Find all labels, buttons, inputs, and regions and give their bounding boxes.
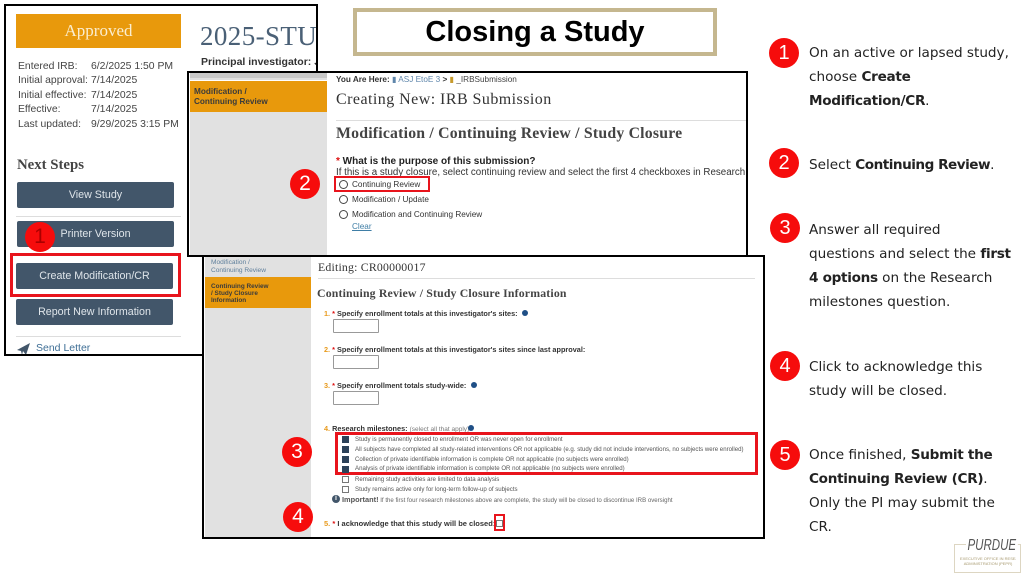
question 1: 1. * Specify enrollment totals at this investigator's sites: — [324, 309, 518, 318]
step 3 text: Answer all required — [809, 222, 941, 238]
section heading: Continuing Review / Study Closure Information — [317, 286, 567, 300]
step 4 text — [809, 359, 982, 399]
checkbox 1 — [342, 436, 349, 443]
step 1 — [769, 38, 1009, 109]
checkbox 2 — [342, 446, 349, 453]
logo: Purdue — [954, 544, 1021, 573]
step 1 text: choose Create — [809, 69, 910, 85]
parent nav link — [211, 259, 266, 274]
step badge 2 on screenshot: 2 — [299, 172, 311, 195]
step badge 1 on screenshot: 1 — [34, 225, 46, 248]
step badge 4 on screenshot: 4 — [292, 505, 304, 528]
important note icon — [332, 495, 340, 503]
step 3 text: milestones question. — [809, 294, 950, 310]
study dates: Initial approval: — [18, 75, 88, 86]
button: create modification: Create Modification/CR — [39, 270, 150, 282]
step 4 number: 4 — [779, 355, 791, 377]
label: continuing review: Continuing Review — [352, 180, 420, 189]
help icon 4 — [468, 425, 474, 431]
step 1 text: Modification/CR. — [809, 93, 929, 109]
button: printer version: Printer Version — [60, 228, 131, 240]
milestone 5: Remaining study activities are limited to data analysis — [355, 476, 499, 483]
button: printer version — [17, 221, 174, 247]
panel: study workspace screenshot — [4, 4, 318, 356]
form heading: Modification / Continuing Review / Study Closure — [336, 125, 682, 142]
help icon 1 — [522, 310, 528, 316]
checkbox 4 — [342, 466, 349, 473]
input 1 — [333, 319, 379, 333]
button: view study — [17, 182, 174, 208]
panel: IRB submission screenshot — [187, 71, 748, 257]
logo subtitle: ADMINISTRATION (PEPR) — [964, 561, 1012, 566]
study dates: Initial effective: — [18, 90, 87, 101]
step 5 text: Continuing Review (CR). — [809, 471, 988, 487]
study dates: 6/2/2025 1:50 PM — [91, 61, 173, 72]
step 5 text: Only the PI may submit the — [809, 495, 995, 511]
active nav item: Continuing Review — [211, 283, 269, 290]
input 2 — [333, 355, 379, 369]
approved status banner — [16, 14, 181, 48]
step 1 number: 1 — [778, 42, 790, 64]
step 2 text: Select Continuing Review. — [809, 157, 994, 173]
next steps heading: Next Steps — [17, 157, 84, 173]
label: modification: Modification / Update — [352, 195, 429, 204]
button: create modification — [16, 263, 173, 289]
question 2: 2. * Specify enrollment totals at this investigator's sites since last approval: — [324, 345, 585, 354]
purpose question: * What is the purpose of this submission? — [336, 156, 535, 167]
step 4 text: Click to acknowledge this — [809, 359, 982, 375]
radio: modification — [339, 195, 348, 204]
submission heading: Creating New: IRB Submission — [336, 91, 552, 108]
highlight: continuing review — [334, 176, 430, 192]
radio: continuing review — [339, 180, 348, 189]
step 4 — [770, 351, 982, 399]
active nav item: / Study Closure — [211, 290, 258, 297]
active nav item — [205, 277, 311, 308]
parent nav link: Continuing Review — [211, 266, 266, 274]
checkbox 3 — [342, 456, 349, 463]
highlight: first four milestones — [335, 432, 758, 475]
step badge 3 on screenshot: 3 — [291, 440, 303, 463]
clear link: Clear — [352, 222, 372, 231]
step 1 text: On an active or lapsed study, — [809, 45, 1009, 61]
help icon 3 — [471, 382, 477, 388]
study dates: Effective: — [18, 104, 61, 115]
editing heading: Editing: CR00000017 — [318, 260, 426, 274]
step 1 number — [769, 38, 799, 68]
step badge 4 on screenshot — [283, 502, 313, 532]
milestone 3: Collection of private identifiable information is complete OR not applicable (no subjects were enrolled) — [355, 456, 629, 463]
step 5 text: Once finished, Submit the — [809, 447, 992, 463]
step 5 text — [809, 447, 995, 535]
checkbox 5 — [342, 476, 349, 483]
title: Closing a Study — [425, 16, 645, 48]
milestone 2: All subjects have completed all study-related interventions OR not applicable (e.g. study did not include interventions, no subjects were enrolled) — [355, 446, 744, 453]
step 5 — [770, 440, 995, 535]
question 4 research milestones: 4. Research milestones: (select all that apply) — [324, 424, 469, 433]
highlight: create modification button — [10, 253, 181, 297]
study dates: 7/14/2025 — [91, 104, 137, 115]
step badge 2 on screenshot — [290, 169, 320, 199]
radio options — [334, 176, 430, 192]
step 3 text — [809, 222, 1011, 310]
side navigation — [205, 257, 311, 539]
send letter link: Send Letter — [36, 342, 90, 354]
study dates: 7/14/2025 — [91, 90, 137, 101]
step 4 number — [770, 351, 800, 381]
button: view study: View Study — [69, 189, 122, 201]
step 3 text: 4 options on the Research — [809, 270, 992, 286]
approved status banner: Approved — [64, 21, 132, 40]
step 2 — [769, 148, 994, 178]
step 3 number: 3 — [779, 217, 791, 239]
input 3 — [333, 391, 379, 405]
active nav item: Continuing Review — [194, 96, 268, 106]
active nav item — [190, 80, 327, 112]
icon: send letter — [17, 343, 30, 354]
study dates: 7/14/2025 — [91, 75, 137, 86]
breadcrumb: You Are Here: ▮ ASJ EtoE 3 > ▮ _IRBSubmission — [336, 75, 517, 84]
step 3 text: questions and select the first — [809, 246, 1011, 262]
checkbox 6 — [342, 486, 349, 493]
side navigation — [190, 73, 327, 257]
step 1 text — [809, 45, 1009, 109]
step 4 text: study will be closed. — [809, 383, 947, 399]
step 5 number — [770, 440, 800, 470]
step 2 number — [769, 148, 799, 178]
study title: 2025-STU — [200, 21, 317, 51]
highlight: acknowledge checkbox — [494, 514, 505, 531]
question 3: 3. * Specify enrollment totals study-wide: — [324, 381, 466, 390]
milestone 4: Analysis of private identifiable information is complete OR not applicable (no subjects were enrolled) — [355, 465, 625, 472]
parent nav link: Modification / — [211, 259, 250, 266]
logo wordmark: PURDUE — [967, 537, 1016, 554]
step badge 1 on screenshot — [25, 222, 55, 252]
acknowledge checkbox — [496, 520, 503, 527]
label: both: Modification and Continuing Review — [352, 210, 482, 219]
study dates: Entered IRB: — [18, 61, 78, 72]
instruction text: If this is a study closure, select continuing review and select the first 4 checkboxes in Research — [336, 167, 745, 178]
milestone 6: Study remains active only for long-term follow-up of subjects — [355, 486, 518, 493]
button: report new information: Report New Information — [38, 306, 151, 318]
step 3 — [770, 213, 1011, 310]
study dates — [18, 61, 179, 130]
important note: Important! If the first four research milestones above are complete, the study will be closed to discontinue IRB oversight — [342, 495, 673, 504]
question 5 acknowledge: 5. * I acknowledge that this study will be closed: — [324, 519, 495, 528]
step 5 text: CR. — [809, 519, 832, 535]
sidebar top band — [190, 73, 327, 78]
step 2 number: 2 — [778, 152, 790, 174]
active nav item: Information — [211, 297, 246, 304]
logo subtitle — [960, 556, 1016, 566]
study dates: 9/29/2025 3:15 PM — [91, 119, 179, 130]
panel: continuing review form screenshot — [202, 255, 765, 539]
milestone 1: Study is permanently closed to enrollment OR was never open for enrollment — [355, 436, 563, 443]
step 3 number — [770, 213, 800, 243]
button: report new information — [16, 299, 173, 325]
study dates: Last updated: — [18, 119, 81, 130]
radio: both — [339, 210, 348, 219]
active nav item: Modification / — [194, 87, 247, 96]
step badge 3 on screenshot — [282, 437, 312, 467]
title — [353, 8, 717, 56]
important note icon: i — [335, 495, 337, 502]
step 5 number: 5 — [779, 444, 791, 466]
principal investigator label: Principal investigator: J — [201, 56, 318, 68]
